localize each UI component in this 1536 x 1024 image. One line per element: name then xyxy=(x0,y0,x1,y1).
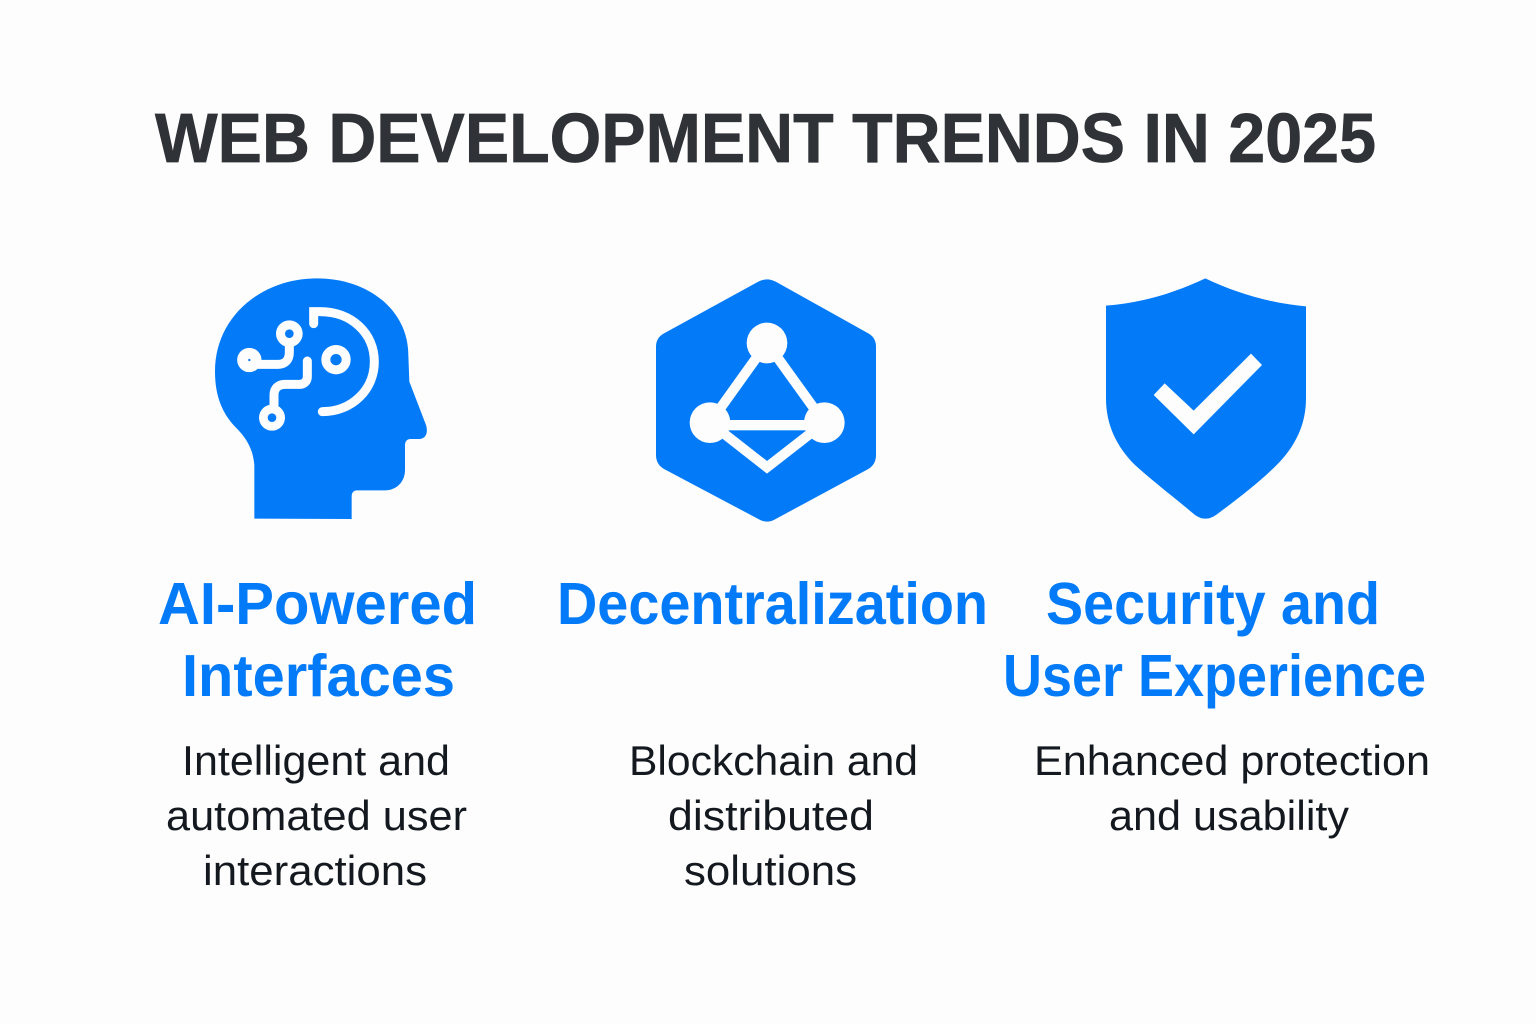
description: Decentralization: solutions xyxy=(684,847,857,894)
icon: network hexagon xyxy=(656,279,876,522)
panel: Security and User Experience xyxy=(1003,278,1430,839)
description: Decentralization xyxy=(629,737,918,894)
description: Decentralization: distributed xyxy=(668,792,874,839)
title: WEB DEVELOPMENT TRENDS IN 2025 xyxy=(155,99,1376,177)
heading: AI-Powered Interfaces: Interfaces xyxy=(182,643,455,709)
description: Security and User Experience: Enhanced protection xyxy=(1034,737,1430,784)
description: AI-Powered Interfaces: automated user xyxy=(166,792,467,839)
description: Security and User Experience xyxy=(1034,737,1430,839)
icon: AI head xyxy=(215,278,427,519)
description: AI-Powered Interfaces xyxy=(166,737,467,894)
description: Security and User Experience: and usability xyxy=(1109,792,1349,839)
heading: Decentralization: Decentralization xyxy=(557,571,988,637)
description: Decentralization: Blockchain and xyxy=(629,737,918,784)
icon: shield with check xyxy=(1106,278,1306,519)
panel: AI-Powered Interfaces xyxy=(158,278,477,894)
heading: Security and User Experience: User Experience xyxy=(1003,643,1426,709)
heading: AI-Powered Interfaces xyxy=(158,571,477,709)
description: AI-Powered Interfaces: Intelligent and xyxy=(182,737,450,784)
heading: AI-Powered Interfaces: AI-Powered xyxy=(158,571,477,637)
description: AI-Powered Interfaces: interactions xyxy=(203,847,427,894)
heading: Security and User Experience: Security and xyxy=(1046,571,1380,637)
panel: Decentralization xyxy=(557,279,988,894)
heading: Security and User Experience xyxy=(1003,571,1426,709)
